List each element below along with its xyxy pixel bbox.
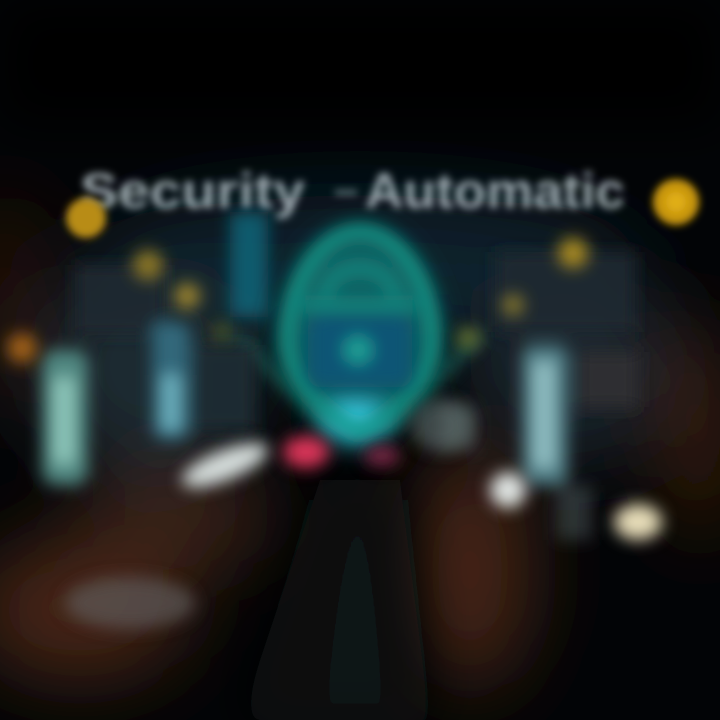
shield outline	[288, 232, 432, 432]
title text: Automatic	[365, 163, 625, 219]
title text	[80, 163, 625, 219]
icon: large yellow light left	[66, 198, 106, 238]
icon: large yellow light right	[653, 179, 699, 225]
title text: Security	[80, 163, 305, 219]
left buildings	[42, 265, 255, 485]
white lights	[65, 399, 662, 629]
green light streaks	[235, 335, 480, 432]
lock body	[300, 300, 418, 387]
shield lock icon	[280, 228, 440, 442]
blue beam behind lock	[230, 212, 268, 317]
vignette top	[0, 0, 720, 125]
red lights	[283, 436, 400, 468]
yellow lights	[7, 179, 699, 363]
road	[240, 480, 430, 720]
shield glow	[280, 228, 440, 442]
small lights	[7, 238, 588, 363]
right buildings	[440, 252, 638, 540]
background glow	[0, 190, 720, 690]
